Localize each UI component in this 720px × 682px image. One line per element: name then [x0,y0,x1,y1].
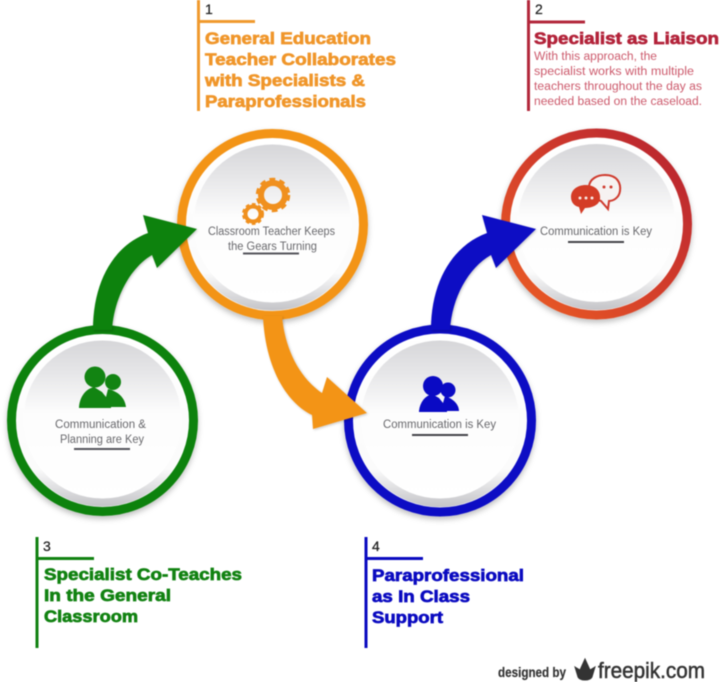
panel: step 4 blue circle [348,329,532,512]
icon: speech bubbles [571,175,620,214]
arrow: green to orange [93,215,197,330]
icon: people [419,376,459,412]
panel: step 2 red circle [506,133,688,315]
text block: step 1: General Education [205,29,371,48]
caption: communication is key: Communication is Key [383,419,496,431]
caption: classroom teacher [208,226,335,254]
arrow: orange to blue [263,316,367,429]
text block: step 3: Specialist Co-Teaches [44,565,242,584]
text block: step 4: 4 [372,538,380,554]
text block: step 2: teachers throughout the day as [534,81,702,93]
caption: classroom teacher: Classroom Teacher Keeps [208,226,335,238]
text block: step 4: as In Class [372,587,470,606]
icon: gears [244,180,288,224]
text block: step 2: Specialist as Liaison [534,29,719,48]
text block: step 1: with Specialists & [204,71,365,90]
text block: step 4: Paraprofessional [372,566,524,585]
caption: communication is key: Communication is Key [540,226,652,238]
text block: step 3: 3 [43,538,51,554]
text block: step 2: specialist works with multiple [534,66,694,78]
logo: designed by freepik: designed by [498,664,566,680]
text block: step 2: needed based on the caseload. [534,96,702,108]
text block: step 2: With this approach, the [534,51,657,63]
text block: step 1: 1 [205,1,213,17]
caption: communication and planning: Planning are Key [60,434,144,446]
text block: step 1 [197,0,396,111]
caption: classroom teacher: the Gears Turning [228,241,317,253]
text block: step 1: Paraprofessionals [205,92,366,111]
text block: step 3 [36,537,242,648]
panel: step 1 orange circle [182,134,364,316]
text block: step 3: In the General [44,586,171,605]
text block: step 2 [527,0,719,111]
text block: step 4: Support [372,608,443,627]
caption: communication and planning: Communication & [55,419,146,431]
icon: people [79,366,126,408]
panel: step 3 green circle [12,330,194,512]
text block: step 2: 2 [535,1,543,17]
text block: step 3: Classroom [44,607,138,626]
caption: communication and planning [55,419,146,450]
logo: designed by freepik [498,658,705,682]
text block: step 4 [364,537,524,648]
text block: step 1: Teacher Collaborates [205,50,396,69]
caption: communication is key [540,226,652,243]
arrow: blue to red [431,215,536,330]
